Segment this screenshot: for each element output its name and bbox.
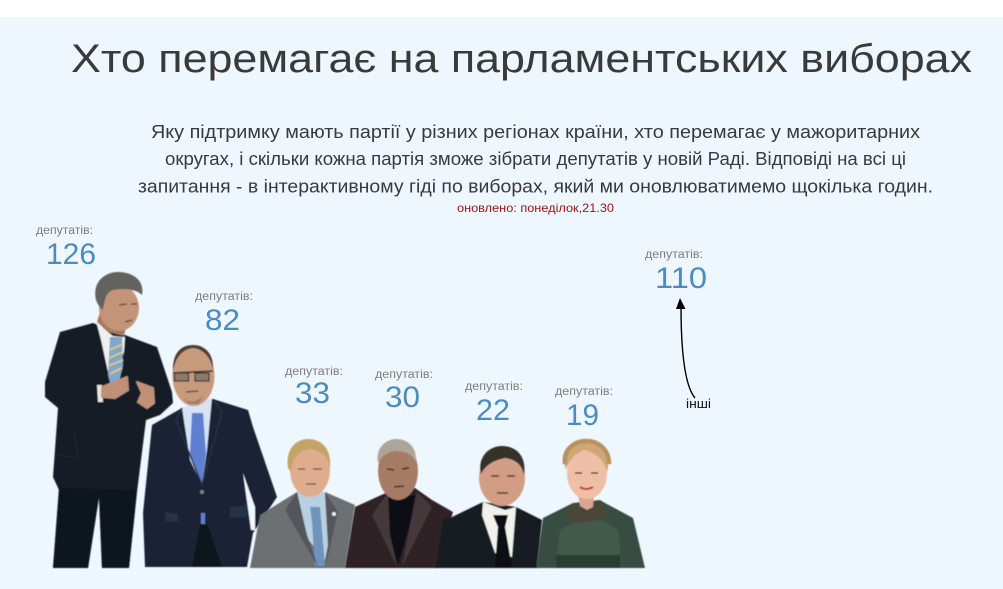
figure: man in brown jacket with dark sweater [345,439,453,568]
intro text block [138,122,933,196]
count: 22 deputies: депутатів: [465,381,523,393]
count: 110 deputies, others: депутатів: [645,249,703,261]
update timestamp: оновлено: понеділок,21.30 [457,203,614,215]
figure: man in black suit and tie [436,446,542,568]
figure: man in dark suit with striped tie [45,272,173,568]
count: 82 deputies: 82 [205,304,240,337]
count: 19 deputies: 19 [566,399,599,432]
count: 126 deputies [36,225,96,271]
count: 30 deputies: 30 [385,381,420,414]
arrow: others to 110 [676,298,695,398]
count: 110 deputies, others [645,249,707,295]
label: others: інші [686,396,711,411]
intro text block: округах, і скільки кожна партія зможе зібрати депутатів у новій Раді. Відповіді на всі ці [165,149,906,169]
count: 33 deputies: депутатів: [285,366,343,378]
figure: man in grey jacket with blue striped tie [250,439,355,568]
count: 110 deputies, others: 110 [655,262,707,295]
count: 19 deputies: депутатів: [555,386,613,398]
intro text block: Яку підтримку мають партії у різних регіонах країни, хто перемагає у мажоритарних [151,122,920,142]
count: 22 deputies [465,381,523,427]
count: 19 deputies [555,386,613,432]
figure: woman with braid in green dress [536,441,645,568]
count: 33 deputies [285,366,343,410]
count: 126 deputies: депутатів: [36,225,93,237]
title: Хто перемагає на парламентських виборах [71,37,972,81]
intro text block: запитання - в інтерактивному гіді по виборах, який ми оновлюватимемо щокілька годин. [138,176,933,196]
count: 30 deputies [375,369,433,414]
count: 33 deputies: 33 [295,377,330,410]
count: 82 deputies [195,291,253,337]
count: 22 deputies: 22 [476,394,510,427]
count: 30 deputies: депутатів: [375,369,433,381]
figure: bald man with glasses and blue tie [143,345,277,567]
count: 126 deputies: 126 [46,238,96,271]
count: 82 deputies: депутатів: [195,291,253,303]
